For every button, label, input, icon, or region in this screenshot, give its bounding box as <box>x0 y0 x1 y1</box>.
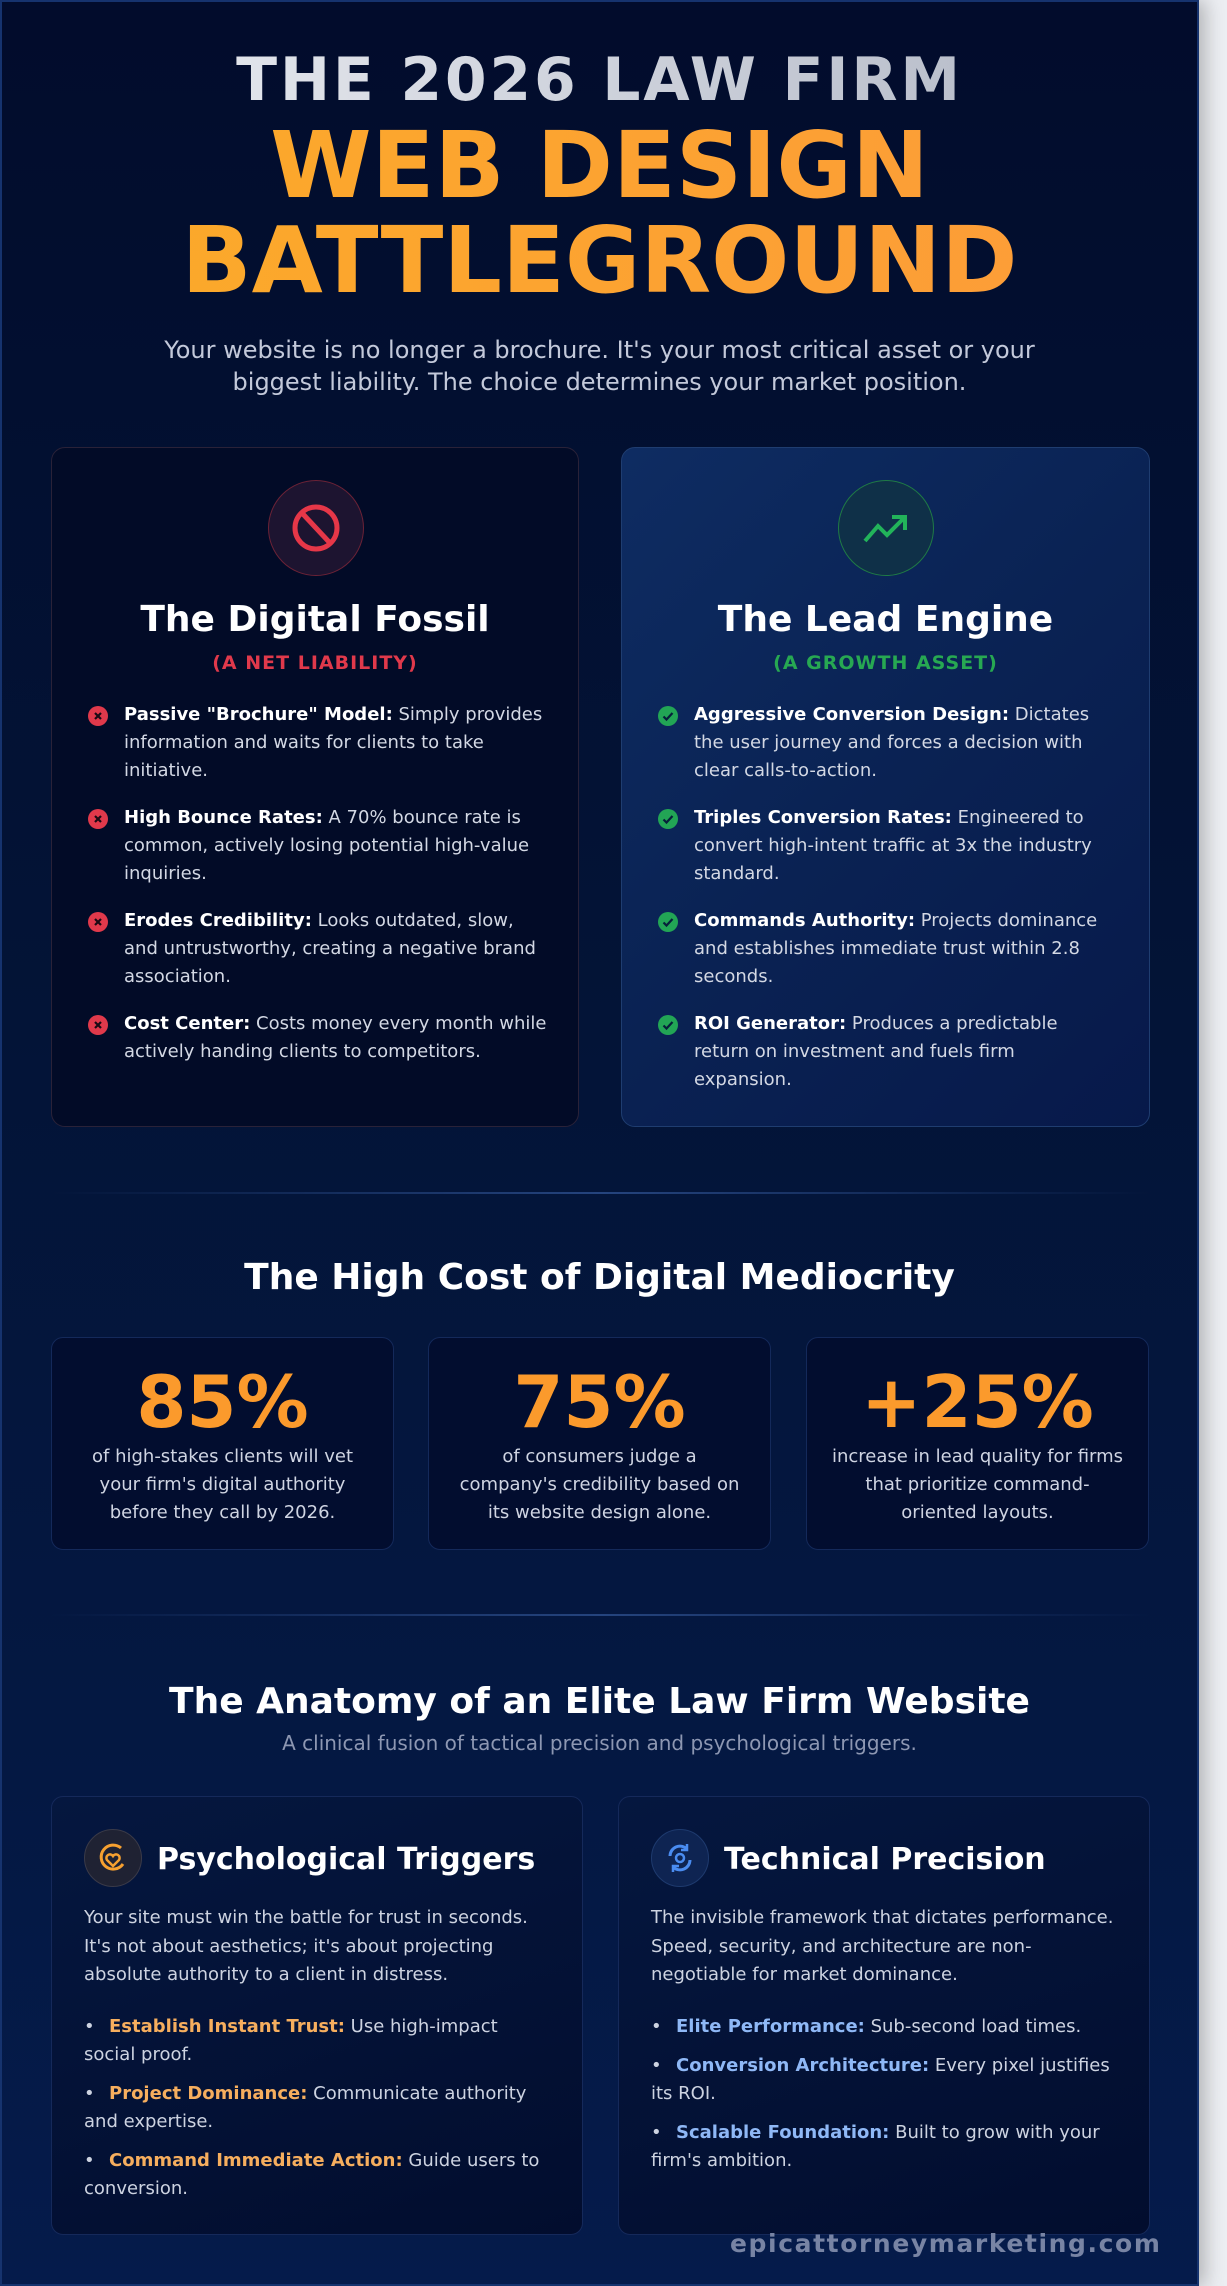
heading: anatomy: The Anatomy of an Elite Law Firm Website <box>169 1681 1030 1722</box>
paragraph: absolute authority to a client in distress. <box>84 1964 448 1985</box>
icon: trend up <box>838 480 934 576</box>
stat: 75%: of consumers judge a <box>502 1446 697 1467</box>
paragraph: negotiable for market dominance. <box>651 1964 958 1985</box>
title main <box>0 118 1199 308</box>
list: liabilities: actively handing clients to competitors. <box>124 1041 481 1062</box>
list: assets: the user journey and forces a decision with <box>694 732 1082 753</box>
stat: 85% <box>51 1337 394 1550</box>
title main: BATTLEGROUND <box>182 207 1017 314</box>
list: liabilities: initiative. <box>124 760 208 781</box>
stat: 75% <box>428 1337 771 1550</box>
list: assets: Triples Conversion Rates: Engineered to <box>694 807 1084 828</box>
bullet list: Project Dominance: Communicate authority <box>109 2083 526 2104</box>
paragraph: Your site must win the battle for trust in seconds. <box>84 1907 528 1928</box>
stat: 85%: your firm's digital authority <box>100 1474 345 1495</box>
bullet list: • <box>84 2150 95 2171</box>
list: assets: expansion. <box>694 1069 792 1090</box>
stat: 85%: of high-stakes clients will vet <box>92 1446 353 1467</box>
subtitle: Your website is no longer a brochure. It's your most critical asset or your <box>164 336 1035 364</box>
list: assets: standard. <box>694 863 780 884</box>
list: liabilities: information and waits for clients to take <box>124 732 484 753</box>
stat: 85%: before they call by 2026. <box>110 1502 335 1523</box>
stat: 75%: its website design alone. <box>488 1502 711 1523</box>
bullet list: • <box>84 2083 95 2104</box>
list: liabilities: High Bounce Rates: A 70% bounce rate is <box>124 807 521 828</box>
list: assets: clear calls-to-action. <box>694 760 877 781</box>
bullet list: • <box>651 2122 662 2143</box>
paragraph: The invisible framework that dictates performance. <box>651 1907 1113 1928</box>
list: liabilities: Cost Center: Costs money every month while <box>124 1013 546 1034</box>
title line 1 <box>0 45 1199 115</box>
bullet list: Elite Performance: Sub-second load times. <box>676 2016 1081 2037</box>
list: assets: Commands Authority: Projects dominance <box>694 910 1097 931</box>
paragraph: Speed, security, and architecture are non- <box>651 1936 1032 1956</box>
bullet list <box>84 2016 539 2199</box>
stat: 75%: company's credibility based on <box>460 1474 739 1495</box>
heading: The Lead Engine <box>718 599 1053 640</box>
list: assets: ROI Generator: Produces a predictable <box>694 1013 1058 1034</box>
list: liabilities: inquiries. <box>124 863 207 884</box>
footer: website: epicattorneymarketing.com <box>730 2229 1161 2258</box>
list: liabilities: common, actively losing potential high-value <box>124 835 529 856</box>
list: liabilities: and untrustworthy, creating a negative brand <box>124 938 536 959</box>
bullet list: Establish Instant Trust: Use high-impact <box>109 2016 498 2037</box>
list: assets: and establishes immediate trust within 2.8 <box>694 938 1080 959</box>
bullet list: firm's ambition. <box>651 2150 792 2171</box>
paragraph: It's not about aesthetics; it's about projecting <box>84 1936 493 1956</box>
tag: (A GROWTH ASSET) <box>773 652 998 674</box>
bullet list: Scalable Foundation: Built to grow with your <box>676 2122 1100 2143</box>
stat: 75%: 75% <box>513 1360 686 1444</box>
bullet list: Command Immediate Action: Guide users to <box>109 2150 539 2171</box>
icon: ban <box>268 480 364 576</box>
panel: digital fossil <box>51 447 579 1127</box>
list: assets: convert high-intent traffic at 3x the industry <box>694 835 1092 856</box>
bullet list: • <box>651 2016 662 2037</box>
list: assets <box>658 704 1097 1090</box>
stat: +25%: oriented layouts. <box>901 1502 1054 1523</box>
list: liabilities: Passive "Brochure" Model: Simply provides <box>124 704 542 725</box>
stat: +25%: that prioritize command- <box>865 1474 1090 1495</box>
bullet list: and expertise. <box>84 2111 213 2132</box>
stat: +25%: increase in lead quality for firms <box>832 1446 1123 1467</box>
heading: Technical Precision <box>724 1842 1046 1877</box>
stat: +25%: +25% <box>861 1360 1094 1444</box>
panel: lead engine <box>621 447 1150 1127</box>
heading: high cost: The High Cost of Digital Mediocrity <box>244 1257 955 1298</box>
subtitle: biggest liability. The choice determines your market position. <box>233 368 966 396</box>
panel: psychological triggers <box>51 1796 583 2235</box>
icon: heart badge <box>84 1829 142 1887</box>
list: assets: seconds. <box>694 966 773 987</box>
heading: Psychological Triggers <box>157 1842 535 1877</box>
bullet list: • <box>651 2055 662 2076</box>
list: liabilities <box>88 704 546 1062</box>
bullet list: Conversion Architecture: Every pixel justifies <box>676 2055 1110 2076</box>
bullet list: conversion. <box>84 2178 188 2199</box>
bullet list <box>651 2016 1110 2171</box>
stat: +25% <box>806 1337 1149 1550</box>
subheading: A clinical fusion of tactical precision and psychological triggers. <box>282 1731 917 1755</box>
stat: 85%: 85% <box>136 1360 309 1444</box>
paragraph <box>650 1907 1113 1985</box>
list: liabilities: association. <box>124 966 231 987</box>
title main: WEB DESIGN <box>270 112 929 219</box>
paragraph <box>84 1907 528 1985</box>
list: assets: Aggressive Conversion Design: Dictates <box>694 704 1089 725</box>
bullet list: social proof. <box>84 2044 192 2065</box>
list: assets: return on investment and fuels firm <box>694 1041 1015 1062</box>
panel: technical precision <box>618 1796 1150 2235</box>
subtitle <box>164 336 1035 396</box>
tag: (A NET LIABILITY) <box>212 652 418 674</box>
list: liabilities: Erodes Credibility: Looks outdated, slow, <box>124 910 514 931</box>
bullet list: • <box>84 2016 95 2037</box>
heading: The Digital Fossil <box>140 599 490 640</box>
bullet list: its ROI. <box>651 2083 716 2104</box>
title line 1: THE 2026 LAW FIRM <box>236 45 963 115</box>
icon: gear refresh <box>651 1829 709 1887</box>
